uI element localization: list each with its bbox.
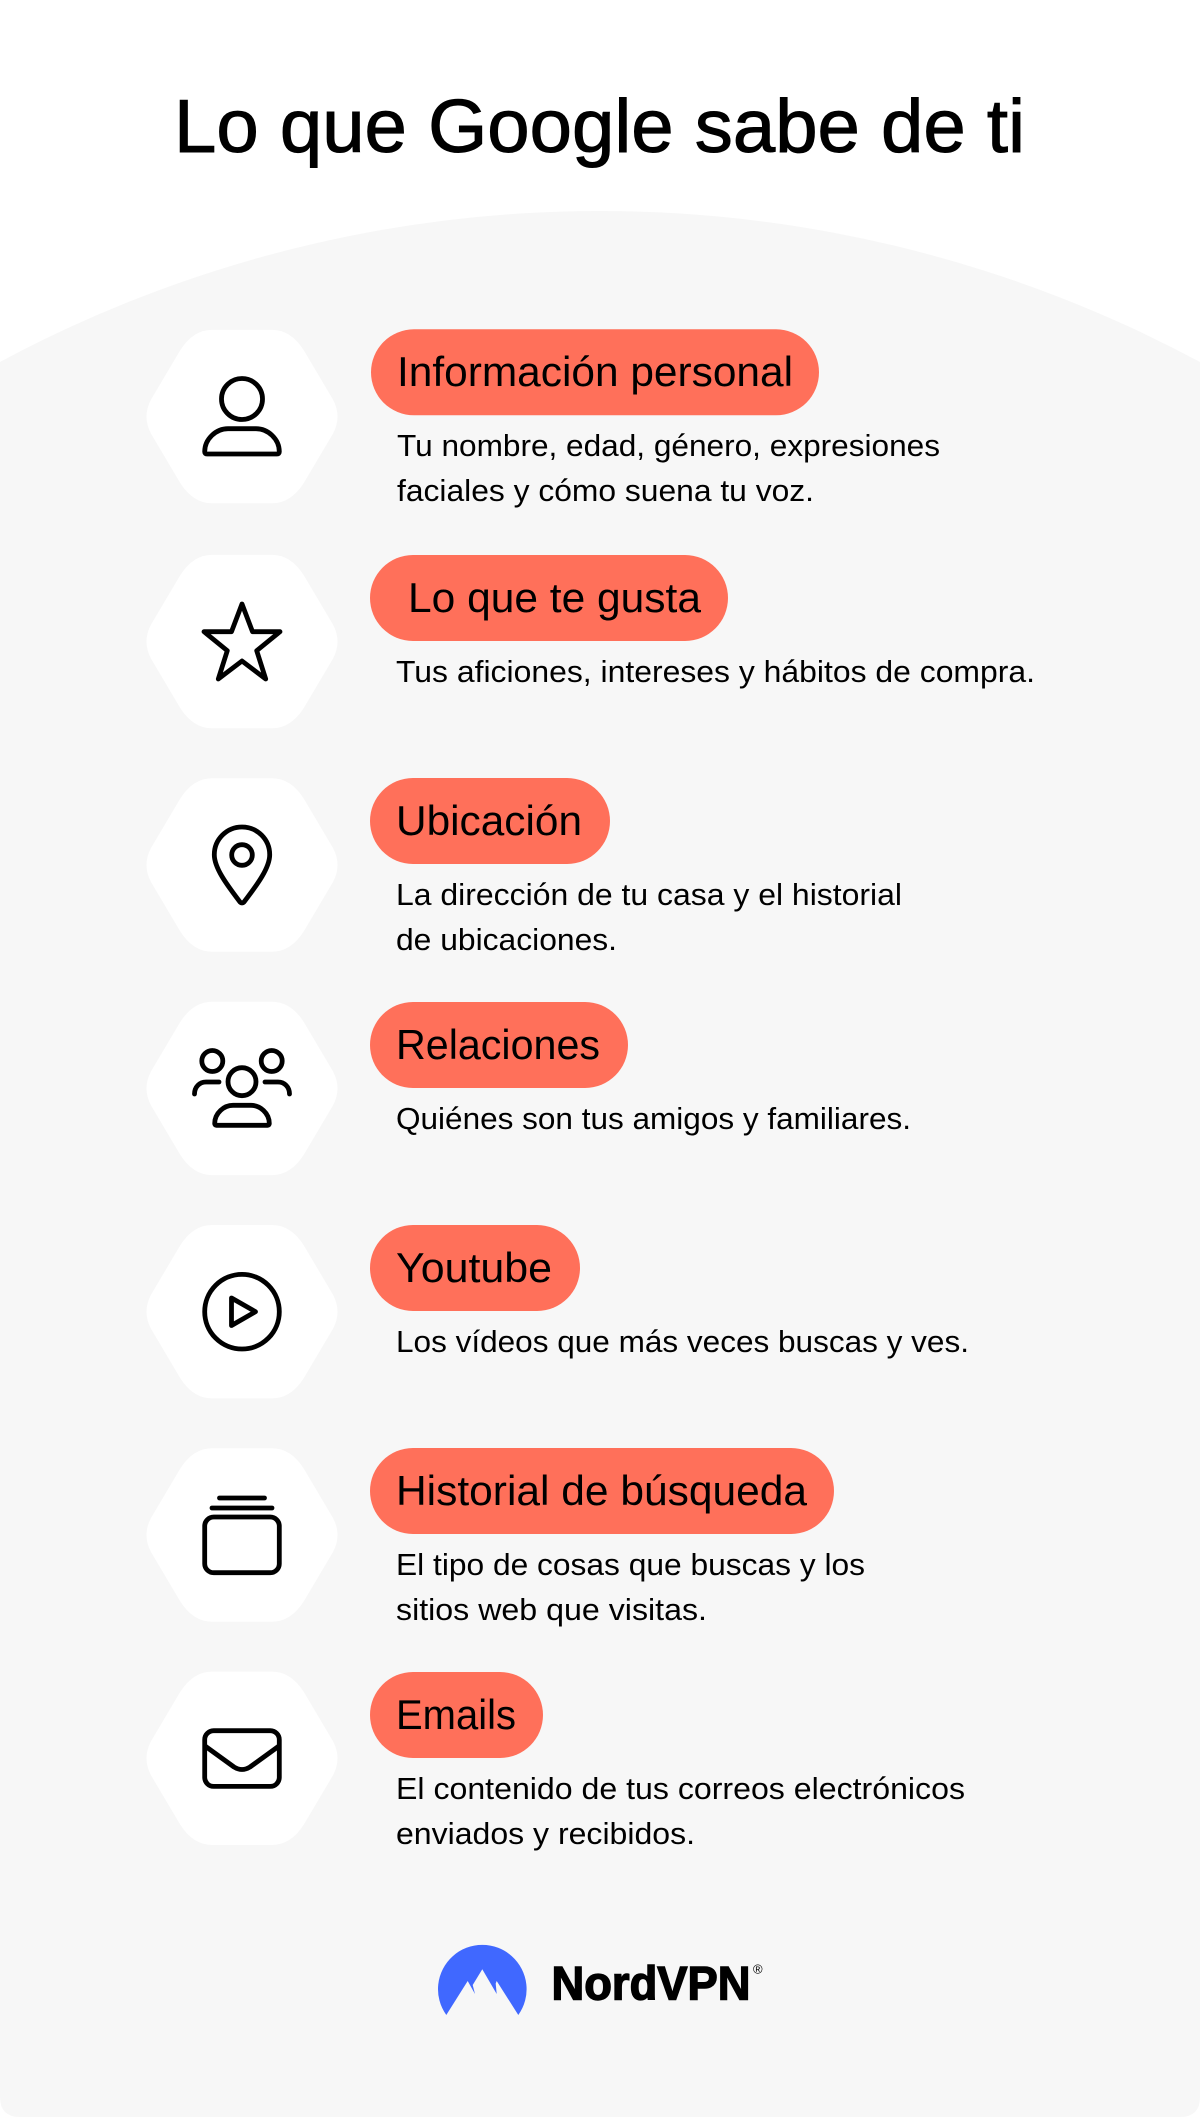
icon: envelope (146, 1672, 338, 1845)
heading pill: Relaciones: Relaciones (396, 1021, 600, 1068)
description: Tu nombre, edad, género, expresiones (397, 429, 940, 463)
panel: ubicación (146, 778, 902, 957)
description: Tus aficiones, intereses y hábitos de compra. (396, 655, 1035, 689)
NordVPN logo (438, 1945, 763, 2015)
heading pill: Lo que te gusta: Lo que te gusta (408, 574, 702, 621)
title: Lo que Google sabe de ti (174, 84, 1025, 168)
icon: person (146, 330, 338, 503)
heading pill: Ubicación: Ubicación (396, 797, 582, 844)
panel: historial de búsqueda (146, 1448, 865, 1627)
panel: youtube (146, 1225, 969, 1398)
heading pill: Emails (370, 1672, 543, 1758)
icon: star (146, 555, 338, 728)
icon: group of people (146, 1002, 338, 1175)
panel: lo que te gusta (146, 555, 1035, 728)
icon: stacked cards (146, 1448, 338, 1622)
panel: relaciones (146, 1002, 911, 1175)
heading pill: Youtube: Youtube (396, 1244, 552, 1291)
heading pill: Youtube (370, 1225, 580, 1311)
panel: información personal (146, 329, 940, 508)
registered mark: ® (753, 1962, 763, 1976)
wordmark: NordVPN (552, 1956, 750, 2009)
icon: map pin (146, 778, 338, 952)
description (396, 1772, 965, 1851)
description (397, 429, 940, 508)
description: Los vídeos que más veces buscas y ves. (396, 1325, 969, 1359)
icon: play button (146, 1225, 338, 1398)
description (396, 1548, 865, 1627)
heading pill: Información personal (371, 329, 819, 415)
icon: NordVPN mountain (438, 1945, 527, 2015)
description: El contenido de tus correos electrónicos (396, 1772, 965, 1806)
description: sitios web que visitas. (396, 1593, 707, 1627)
heading pill: Historial de búsqueda: Historial de búsqueda (396, 1467, 808, 1514)
heading pill: Relaciones (370, 1002, 628, 1088)
description: El tipo de cosas que buscas y los (396, 1548, 865, 1582)
heading pill: Lo que te gusta (370, 555, 728, 641)
description (396, 878, 902, 957)
description: Quiénes son tus amigos y familiares. (396, 1102, 911, 1136)
description: de ubicaciones. (396, 923, 617, 957)
heading pill: Emails: Emails (396, 1691, 516, 1738)
description: La dirección de tu casa y el historial (396, 878, 902, 912)
description: faciales y cómo suena tu voz. (397, 474, 814, 508)
panel: emails (146, 1672, 965, 1851)
heading pill: Ubicación (370, 778, 610, 864)
heading pill: Información personal: Información personal (397, 348, 793, 395)
description: enviados y recibidos. (396, 1817, 695, 1851)
heading pill: Historial de búsqueda (370, 1448, 834, 1534)
